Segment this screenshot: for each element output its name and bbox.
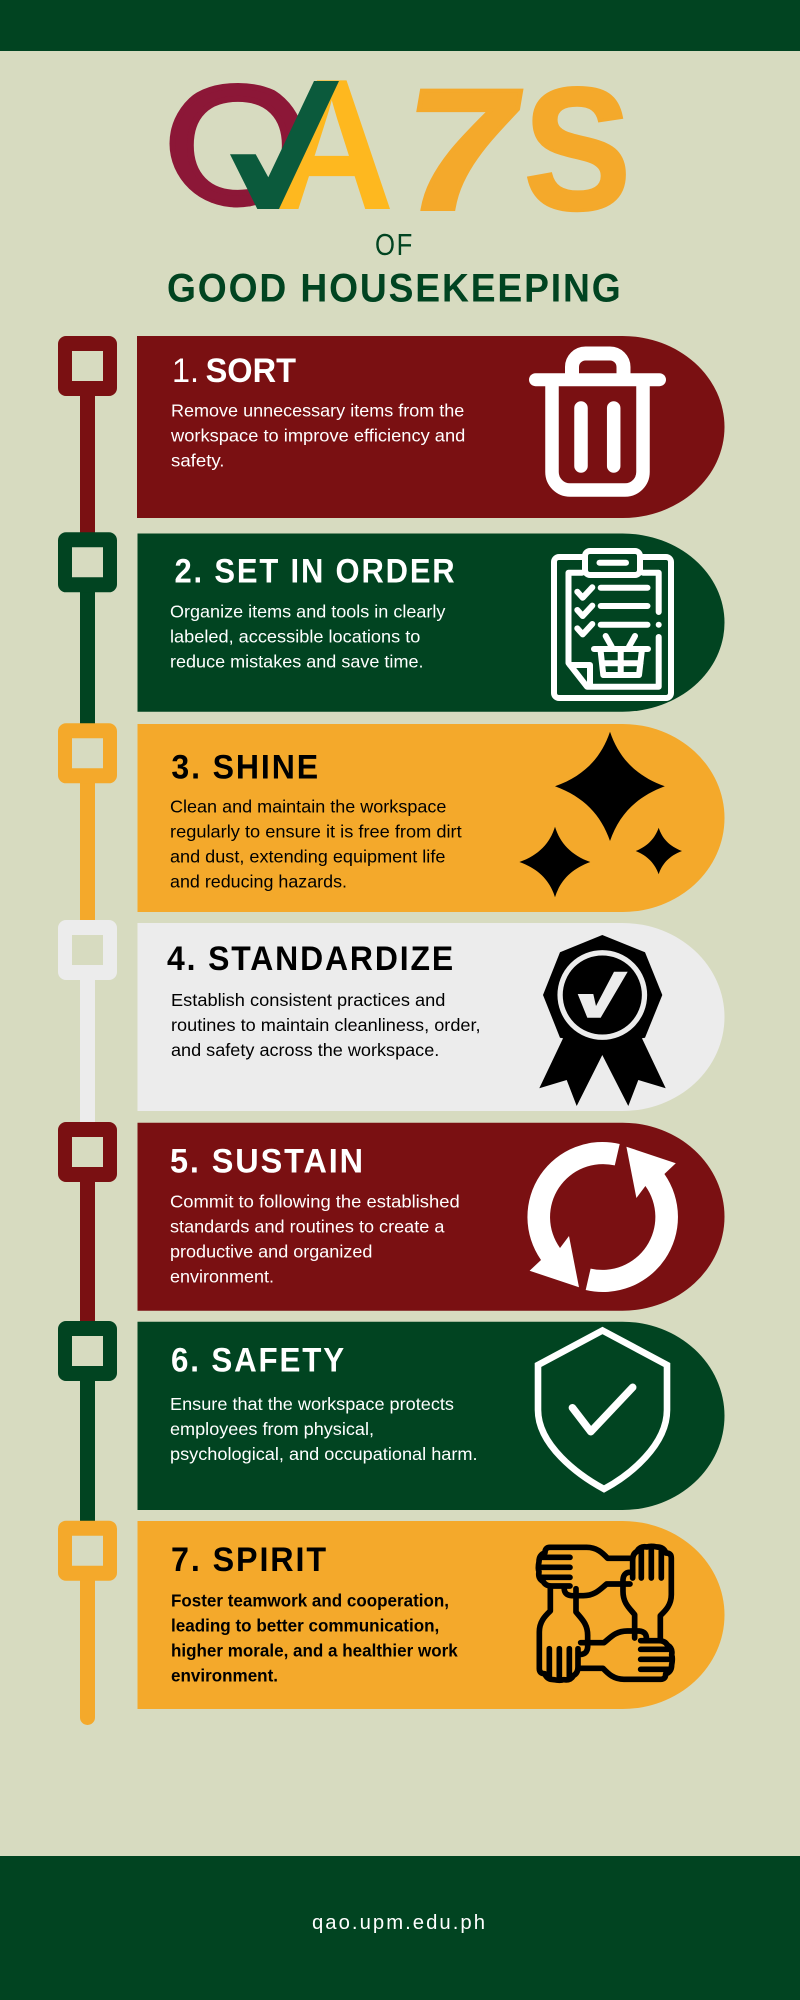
body text: psychological, and occupational harm. xyxy=(170,1444,478,1464)
timeline step 5 xyxy=(58,1122,117,1324)
logo numeral 7: 7 xyxy=(387,53,536,246)
timeline xyxy=(58,336,117,1725)
panel background xyxy=(138,724,725,912)
heading: GOOD HOUSEKEEPING: GOOD HOUSEKEEPING xyxy=(167,266,622,310)
heading: 2. SET IN ORDER: 2. SET IN ORDER xyxy=(174,553,456,591)
panel background xyxy=(138,1322,724,1510)
body text: and safety across the workspace. xyxy=(171,1040,439,1060)
logo letter S: S xyxy=(524,53,631,246)
footer band xyxy=(0,1856,800,2000)
top band xyxy=(0,0,800,51)
body text: Ensure that the workspace protects xyxy=(170,1394,454,1414)
subtitle: OF: OF xyxy=(375,227,414,262)
icon: four joined hands xyxy=(538,1546,672,1680)
body text: and reducing hazards. xyxy=(170,872,347,892)
body text: environment. xyxy=(170,1267,274,1287)
heading: 4. STANDARDIZE: 4. STANDARDIZE xyxy=(167,940,455,978)
title block xyxy=(168,80,626,302)
body text xyxy=(170,401,465,471)
body text: higher morale, and a healthier work xyxy=(171,1641,458,1661)
panel background xyxy=(138,1521,725,1709)
body text: leading to better communication, xyxy=(171,1616,439,1636)
icon: sparkles xyxy=(519,732,682,897)
body text: Foster teamwork and cooperation, xyxy=(171,1591,449,1611)
icon: shield with check xyxy=(538,1330,667,1489)
heading: 7. SPIRIT: 7. SPIRIT xyxy=(171,1541,328,1579)
timeline step 3 xyxy=(58,723,117,923)
timeline step 1 xyxy=(58,336,117,540)
body text xyxy=(171,990,481,1060)
timeline step 6 xyxy=(58,1321,117,1523)
logo letter A: A xyxy=(269,41,395,249)
body text: employees from physical, xyxy=(170,1419,374,1439)
body text: routines to maintain cleanliness, order, xyxy=(171,1015,481,1035)
panel background xyxy=(138,1123,725,1311)
body text: Clean and maintain the workspace xyxy=(170,797,446,817)
panel: 2 set in order xyxy=(138,534,724,712)
icon: award ribbon xyxy=(539,935,666,1106)
body text: Remove unnecessary items from the xyxy=(171,401,464,421)
panel: 5 sustain xyxy=(138,1123,725,1311)
panel background xyxy=(138,923,725,1111)
logo checkmark xyxy=(230,81,339,209)
body text xyxy=(170,797,462,892)
heading: 1. SORT: 1. xyxy=(172,352,199,390)
body text: environment. xyxy=(171,1666,278,1686)
body text xyxy=(170,602,446,672)
icon: cycle arrows xyxy=(527,1142,678,1292)
body text: Organize items and tools in clearly xyxy=(170,602,446,622)
body text: regularly to ensure it is free from dirt xyxy=(170,822,462,842)
body text: standards and routines to create a xyxy=(170,1217,445,1237)
panel: 4 standardize xyxy=(138,923,725,1111)
timeline step 4 xyxy=(58,920,117,1124)
logo letter Q: Q xyxy=(163,52,313,240)
heading: 5. SUSTAIN: 5. SUSTAIN xyxy=(170,1143,365,1181)
heading: 1. SORT: SORT xyxy=(206,352,296,390)
body text: reduce mistakes and save time. xyxy=(170,652,424,672)
body text xyxy=(171,1591,458,1686)
panel: 1 sort xyxy=(137,336,725,518)
body text xyxy=(170,1192,460,1287)
heading: 3. SHINE: 3. SHINE xyxy=(171,748,320,786)
footer url: qao.upm.edu.ph xyxy=(312,1912,487,1934)
panel background xyxy=(138,534,724,712)
body text: Commit to following the established xyxy=(170,1192,460,1212)
body text: productive and organized xyxy=(170,1242,372,1262)
body text xyxy=(170,1394,478,1464)
body text: safety. xyxy=(171,451,224,471)
panel background xyxy=(137,336,725,518)
panel: 7 spirit xyxy=(138,1521,725,1709)
body text: and dust, extending equipment life xyxy=(170,847,445,867)
panel: 6 safety xyxy=(138,1322,724,1510)
icon: clipboard with basket xyxy=(554,551,671,698)
body text: workspace to improve efficiency and xyxy=(170,426,465,446)
heading: 6. SAFETY: 6. SAFETY xyxy=(171,1342,346,1380)
logo: QA7S xyxy=(170,80,626,212)
timeline step 2 xyxy=(58,532,117,726)
body text: Establish consistent practices and xyxy=(171,990,445,1010)
body text: labeled, accessible locations to xyxy=(170,627,420,647)
panel: 3 shine xyxy=(138,724,725,912)
timeline step 7 xyxy=(58,1521,117,1725)
icon: trash can xyxy=(536,354,660,490)
